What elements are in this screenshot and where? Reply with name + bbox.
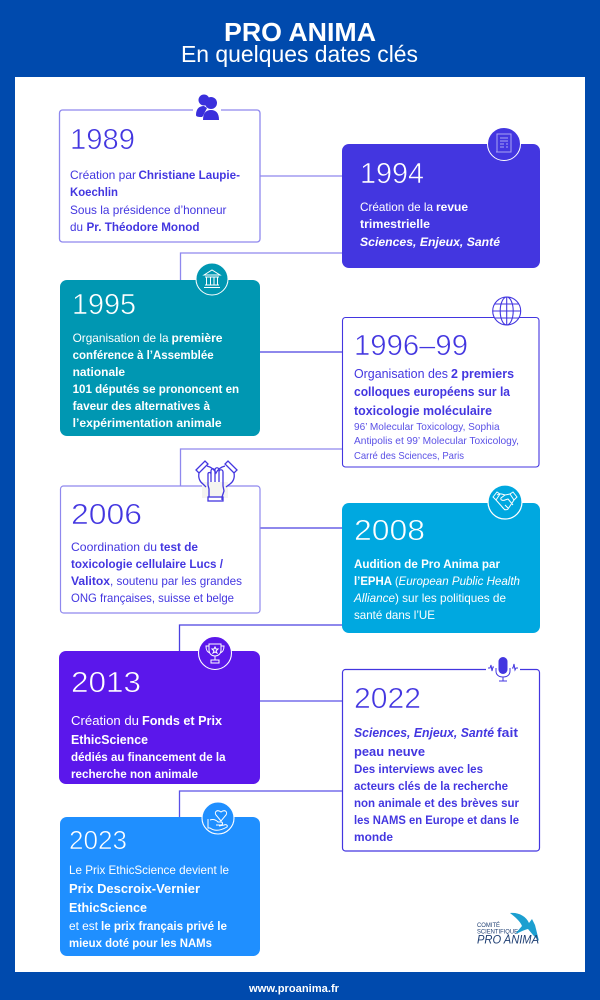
- text 1995: [73, 331, 239, 430]
- text 2008: European Public Health: [398, 574, 520, 588]
- icon: microphone: [486, 657, 520, 681]
- text 2022: fait: [497, 726, 519, 740]
- year 1995: 1995: [72, 289, 136, 321]
- connector 1995 to 1996: [260, 351, 342, 353]
- text 2006: Valitox: [71, 574, 110, 588]
- text 2022: acteurs clés de la recherche: [354, 779, 508, 793]
- logo text: SCIENTIFIQUE: [477, 928, 519, 936]
- text 1989: [70, 168, 240, 234]
- text 2022: non animale et des brèves sur: [354, 796, 519, 810]
- text 2008: l’EPHA: [354, 574, 392, 588]
- icon: joined hands: [196, 461, 237, 501]
- text 1994: revue: [436, 200, 468, 214]
- year 1996-99: 1996–99: [354, 330, 468, 362]
- icon: institution: [196, 263, 228, 295]
- text 1994: [360, 200, 500, 249]
- logo text: [477, 920, 539, 946]
- footer url: www.proanima.fr: [248, 983, 340, 995]
- text 2013: Création du: [71, 714, 139, 728]
- text 2022: [354, 726, 519, 844]
- panel: 2008: [342, 485, 540, 633]
- text 1996-99: toxicologie moléculaire: [354, 404, 492, 418]
- text 1996-99: colloques européens sur la: [354, 385, 511, 399]
- text 2008: santé dans l’UE: [354, 608, 435, 622]
- title: En quelques dates clés: [181, 41, 418, 67]
- connector 2013 to 2022: [260, 700, 342, 702]
- logo bird: [510, 913, 539, 941]
- text 1989: Sous la présidence d’honneur: [70, 203, 226, 217]
- text 2023: mieux doté pour les NAMs: [69, 936, 212, 950]
- text 1995: 101 députés se prononcent en: [73, 382, 239, 396]
- text 1994: trimestrielle: [360, 217, 430, 231]
- text 2022: Des interviews avec les: [354, 762, 483, 776]
- text 2023: et est: [69, 919, 99, 933]
- text 2006: , soutenu par les grandes: [110, 574, 242, 588]
- text 1995: nationale: [73, 365, 125, 379]
- text 2023: [69, 863, 229, 950]
- text 2013: Fonds et Prix: [142, 714, 222, 728]
- text 2006: test de: [160, 540, 198, 554]
- text 1996-99: Antipolis et 99’ Molecular Toxicology,: [354, 435, 519, 447]
- panel: 1994: [342, 128, 540, 268]
- text 2023: EthicScience: [69, 901, 147, 915]
- text 2006: ONG françaises, suisse et belge: [71, 591, 234, 605]
- connector 2006 to 2008: [260, 527, 342, 529]
- text 1995: Organisation de la: [73, 331, 169, 345]
- icon: handshake: [488, 485, 522, 519]
- text 1996-99: Carré des Sciences, Paris: [354, 450, 464, 462]
- text 2008: [353, 557, 520, 622]
- panel: 2022: [342, 657, 540, 851]
- logo text: PRO ANIMA: [477, 932, 539, 946]
- text 1995: première: [172, 331, 223, 345]
- text 2008: (: [395, 574, 398, 588]
- text 2022: les NAMS en Europe et dans le: [354, 813, 519, 827]
- icon: globe: [493, 297, 521, 325]
- title: PRO ANIMA: [224, 17, 376, 47]
- text 2022: Sciences, Enjeux, Santé: [354, 726, 494, 740]
- icon: trophy: [198, 636, 232, 670]
- icon: hand with heart: [202, 802, 234, 834]
- text 2006: [71, 540, 242, 605]
- panel: 2013: [59, 636, 260, 784]
- year 2006: 2006: [71, 499, 142, 531]
- connector 1996 to 2006: [180, 449, 342, 486]
- text 1995: l’expérimentation animale: [73, 416, 222, 430]
- text 1989: Pr. Théodore Monod: [86, 220, 200, 234]
- text 1995: conférence à l’Assemblée: [73, 348, 214, 362]
- text 1996-99: [354, 367, 519, 462]
- year 2008: 2008: [354, 515, 425, 547]
- logo text: COMITÉ: [477, 920, 501, 929]
- text 1994: Sciences, Enjeux, Santé: [360, 235, 500, 249]
- text 1996-99: 96’ Molecular Toxicology, Sophia: [354, 421, 500, 433]
- text 2008: Audition de Pro Anima par: [354, 557, 500, 571]
- text 1994: Création de la: [360, 200, 433, 214]
- text 1989: Christiane Laupie-: [138, 168, 240, 182]
- text 2013: [71, 714, 226, 781]
- connector 1994 to 1995: [180, 253, 342, 280]
- connector 2022 to 2023: [180, 791, 342, 817]
- year 2013: 2013: [71, 667, 141, 699]
- text 1989: Koechlin: [70, 185, 118, 199]
- text 1996-99: Organisation des: [354, 367, 448, 381]
- year 1989: 1989: [70, 124, 135, 156]
- text 2023: le prix français privé le: [101, 919, 227, 933]
- year 1994: 1994: [360, 158, 424, 190]
- text 1989: du: [70, 220, 83, 234]
- panel: 2006: [60, 461, 260, 613]
- text 1989: Création par: [70, 168, 136, 182]
- connector 2008 to 2013: [180, 625, 342, 651]
- text 2023: Le Prix EthicScience devient le: [69, 863, 229, 877]
- panel: 1989: [60, 94, 260, 242]
- title: [181, 17, 418, 67]
- text 2022: monde: [354, 830, 393, 844]
- icon: journal: [488, 128, 520, 160]
- text 2013: dédiés au financement de la: [71, 750, 226, 764]
- panel: 2023: [60, 802, 260, 956]
- year 2023: 2023: [69, 825, 127, 855]
- icon: people: [193, 94, 221, 120]
- text 2013: recherche non animale: [71, 767, 198, 781]
- text 2008: ) sur les politiques de: [395, 591, 506, 605]
- text 2013: EthicScience: [71, 733, 148, 747]
- connector 1989 to 1994: [260, 175, 342, 177]
- text 2022: peau neuve: [354, 745, 425, 759]
- text 2008: Alliance: [353, 591, 395, 605]
- year 2022: 2022: [354, 683, 421, 715]
- text 2023: Prix Descroix-Vernier: [69, 882, 200, 896]
- logo: comité scientifique Pro Anima: [477, 913, 539, 946]
- panel: 1996-99: [342, 297, 539, 467]
- text 2006: Coordination du: [71, 540, 157, 554]
- panel: 1995: [60, 263, 260, 436]
- text 1995: faveur des alternatives à: [73, 399, 210, 413]
- text 1996-99: 2 premiers: [451, 367, 514, 381]
- text 2006: toxicologie cellulaire Lucs /: [71, 557, 224, 571]
